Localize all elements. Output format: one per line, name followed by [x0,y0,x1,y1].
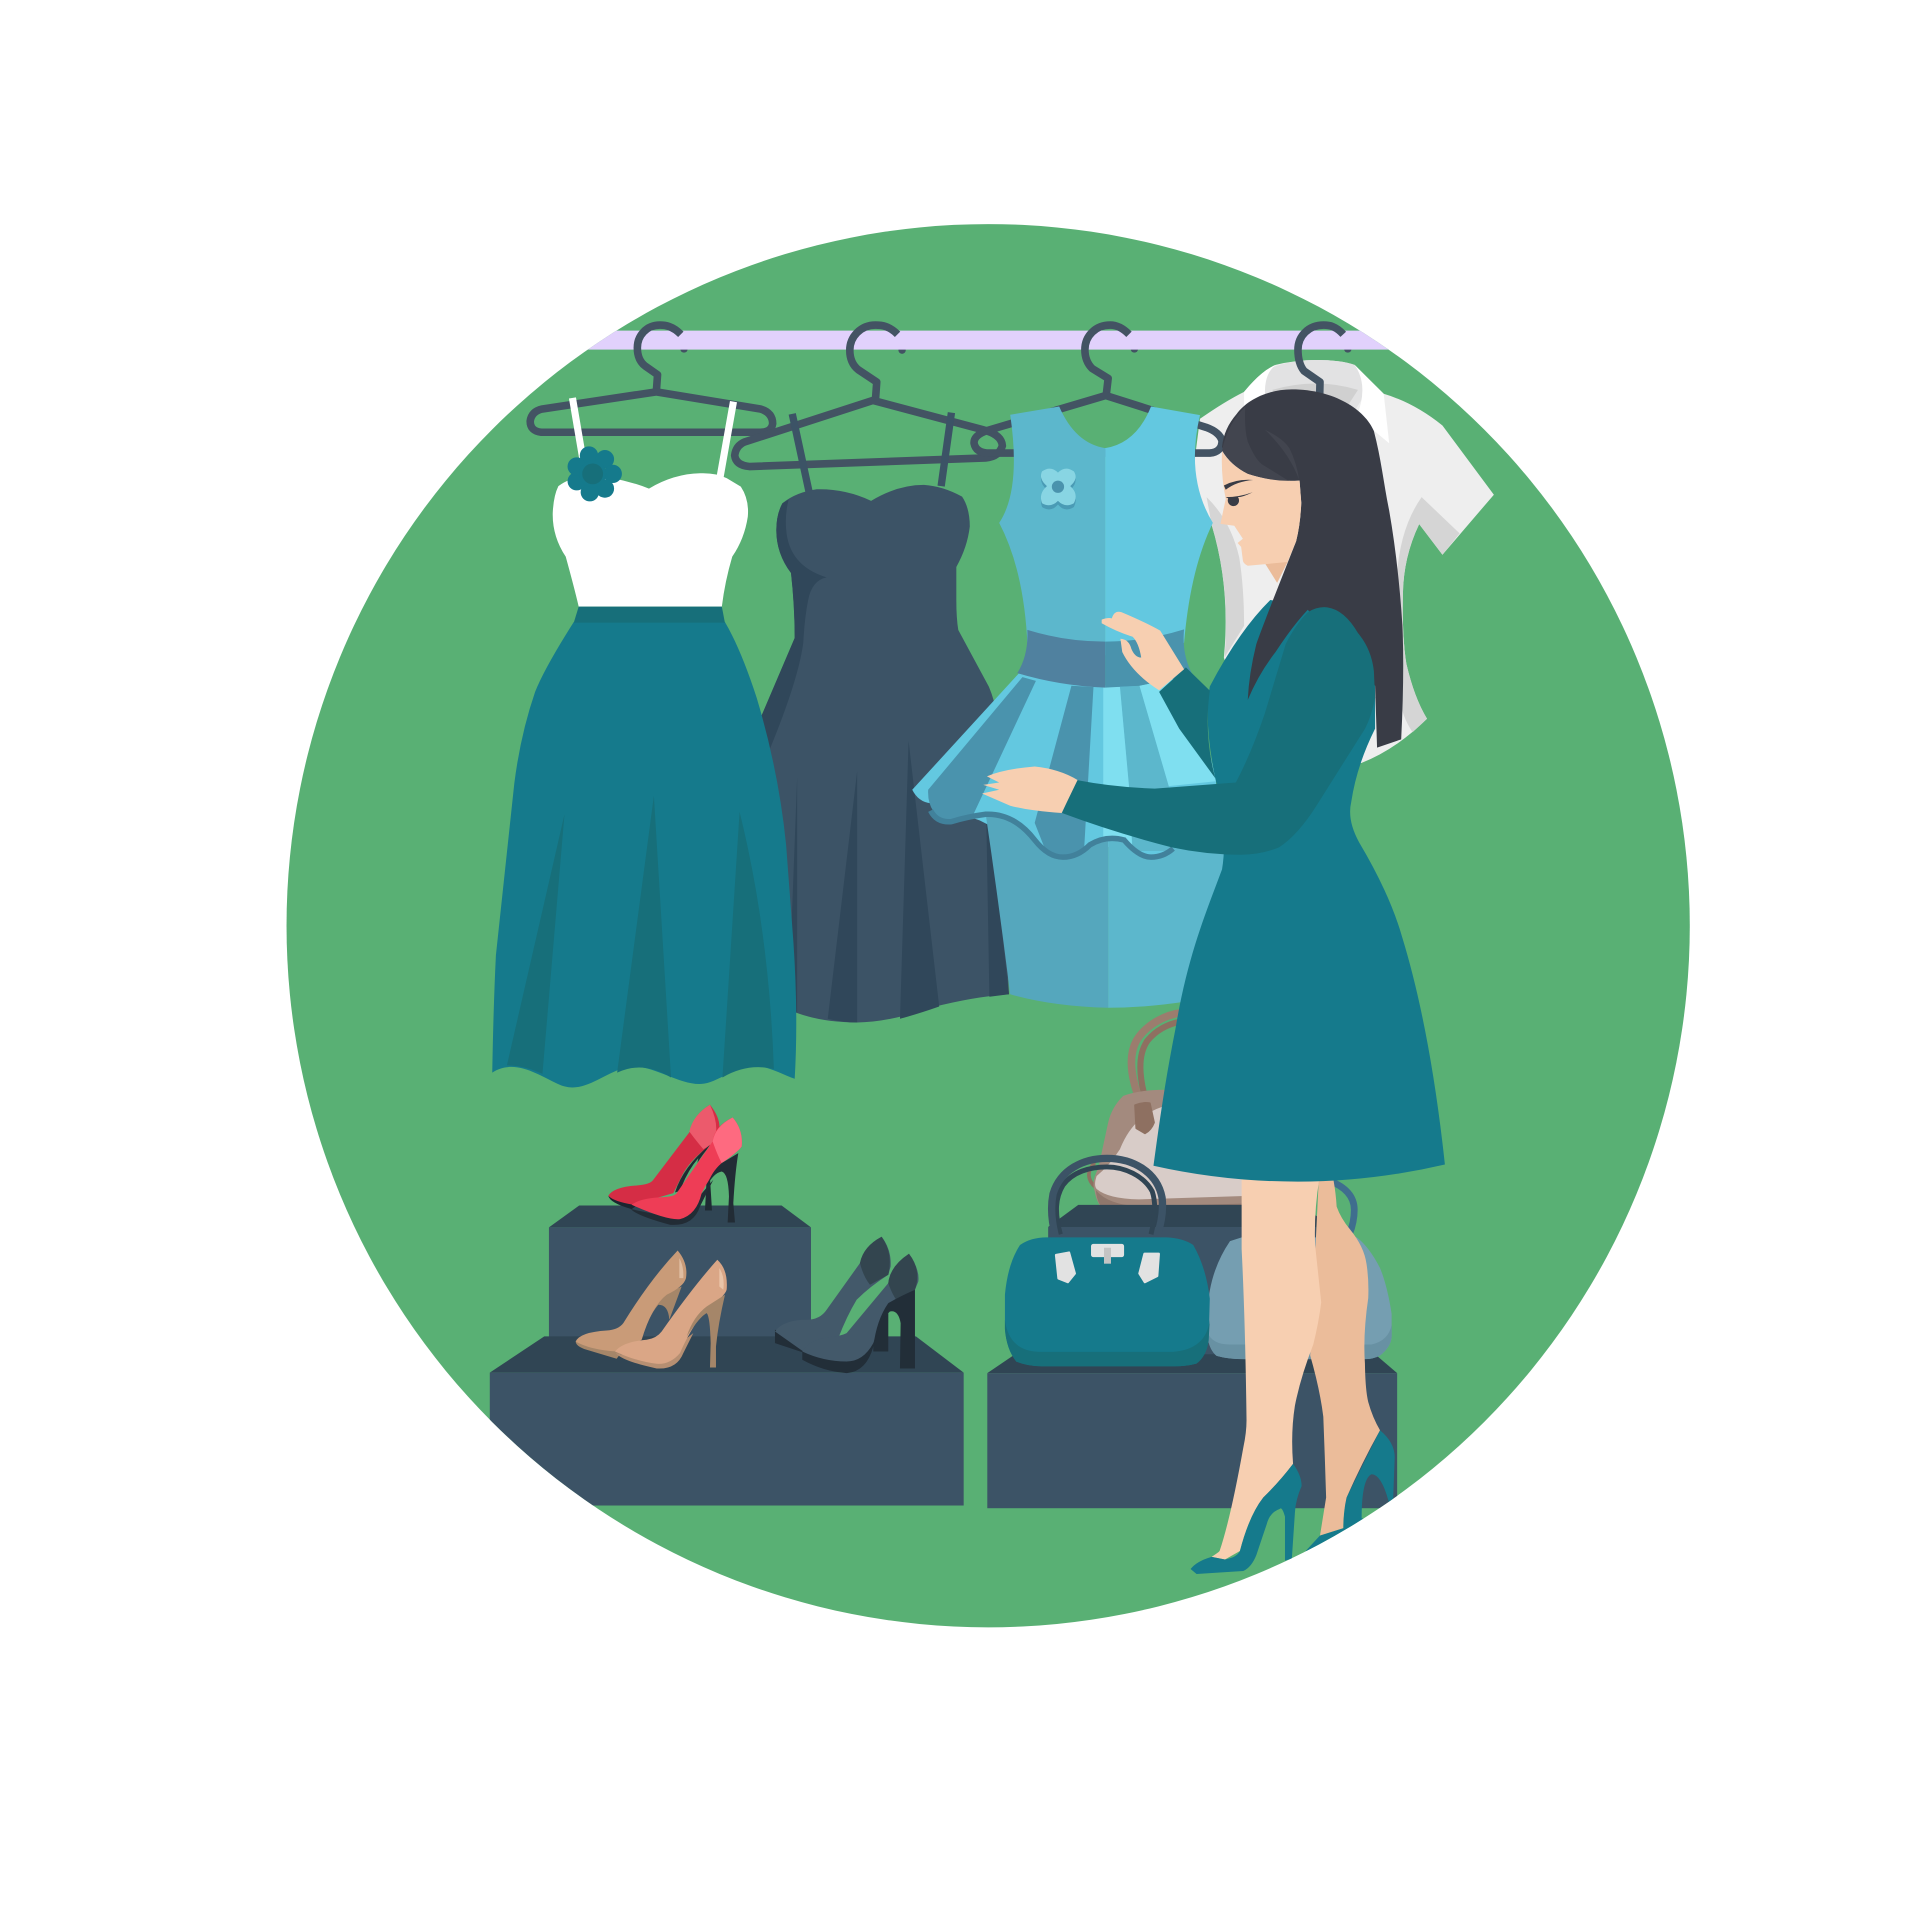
beige handbag [1089,1013,1244,1218]
teal bag handles [1056,1167,1155,1234]
back shoe [1305,1430,1395,1551]
wavy hem [931,811,1173,857]
large step [987,1354,1397,1373]
high heels [576,1105,919,1373]
blue bag body [1207,1237,1392,1359]
bag display [987,1205,1397,1508]
woman [982,389,1445,1574]
clothes rail [588,330,1388,350]
skirt pleats [507,796,774,1078]
white and teal dress [492,398,796,1087]
lower skirt left [986,814,1108,1008]
clipped scene [490,321,1494,1574]
skirt waistband [574,607,725,623]
light blue dress [912,407,1237,1008]
lower skirt right [1108,841,1224,1008]
flower appliqué [1041,469,1076,509]
hair [1222,389,1403,748]
navy dress pleats [789,741,1009,1022]
red shoes [608,1105,742,1225]
front shoe [1191,1464,1302,1574]
back leg [1310,1179,1380,1536]
teal bag tabs and clasp [1056,1253,1159,1282]
illustration: woman choosing clothes in a boutique [286,224,1690,1628]
teal dress [1153,600,1445,1182]
navy dress shading [761,500,827,749]
upper skirt panels [912,673,1218,863]
small step [1048,1205,1335,1227]
hanger 3 [974,325,1222,453]
face [1220,451,1301,566]
navy dress straps [792,413,951,492]
bodice right [1105,407,1213,655]
lower hand [982,767,1078,813]
shirt shadows [1207,497,1460,732]
shirt on hanger [1194,360,1494,784]
neck [1265,561,1288,583]
hanger 4 [1298,325,1343,398]
hair highlight [1222,407,1299,481]
hanger 2 [735,325,1002,467]
teal bag body [1005,1237,1210,1366]
blue handbag [1207,1180,1392,1359]
white bodice [553,473,748,607]
green background circle [287,224,1690,1627]
hanger 1 [530,325,773,432]
front leg [1212,1178,1321,1560]
upper hand [1102,612,1184,690]
eyebrow [1224,480,1253,490]
dark shoes [775,1237,919,1373]
front sleeve and arm [1062,607,1375,855]
stepped shoe display [490,1206,964,1506]
beige shoes [576,1250,727,1369]
bodice left [999,407,1105,655]
beige bag handles [1140,1021,1182,1092]
dress straps [572,398,733,478]
teal skirt [492,622,796,1087]
eye [1226,492,1253,506]
back sleeve [1159,667,1215,778]
lower step [490,1336,964,1373]
hanger hook tips behind rail [680,350,1352,354]
flower brooch [568,446,622,501]
belt [1017,630,1105,688]
beige bag body [1094,1090,1242,1205]
shirt collar [1264,360,1362,408]
teal handbag [1005,1158,1210,1366]
blue bag handle [1329,1180,1354,1234]
navy dress [735,413,1009,1022]
upper step [549,1206,811,1227]
navy dress body [735,485,1009,1022]
beige bag tab [1135,1103,1154,1133]
